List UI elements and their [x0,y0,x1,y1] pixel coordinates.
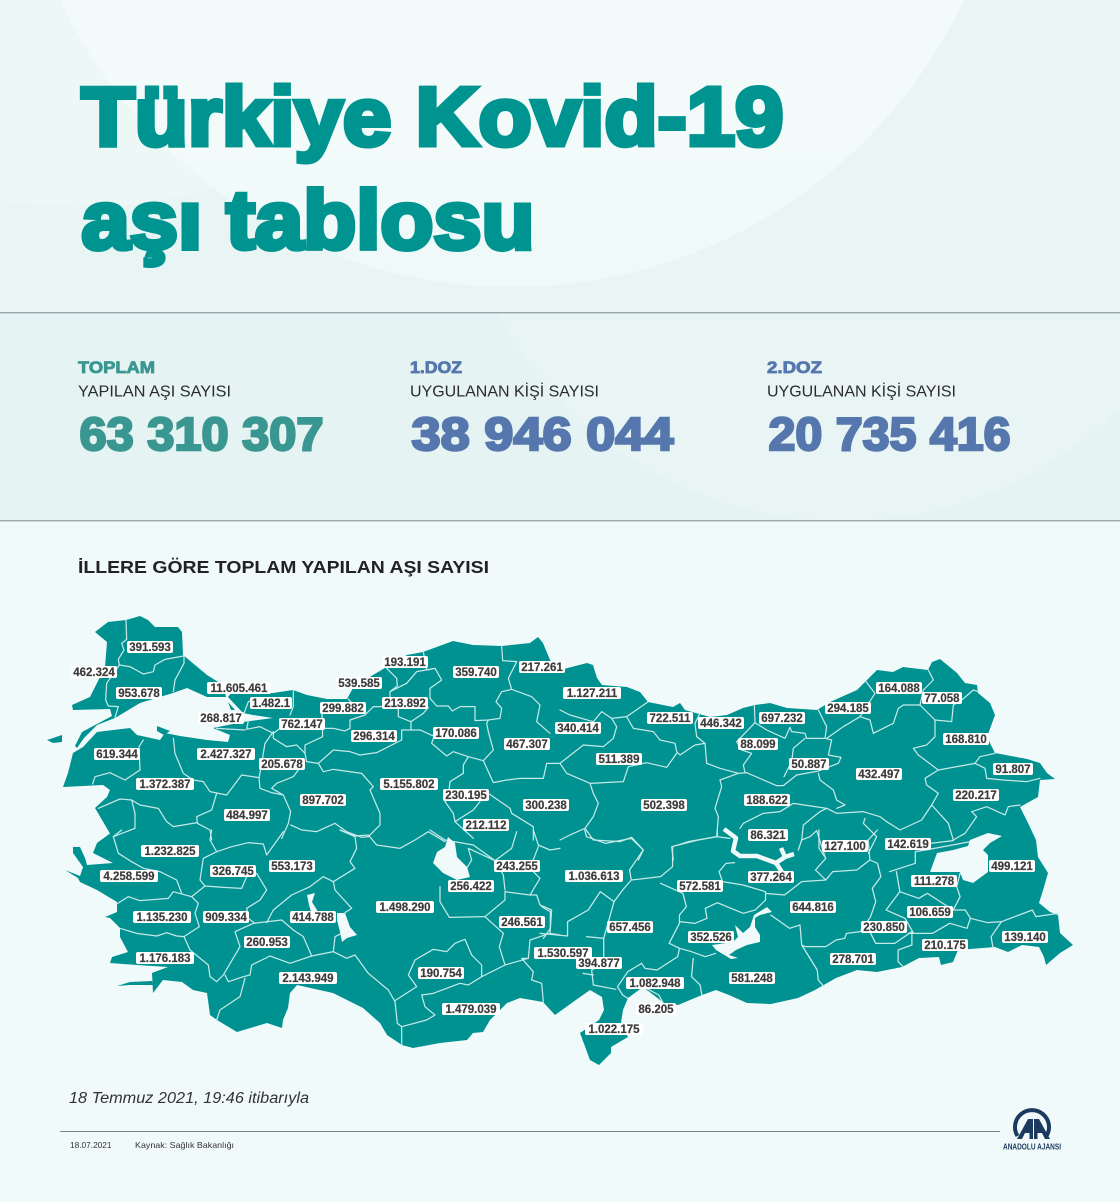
label 296.314: 296.314 [353,731,395,743]
label 299.882: 299.882 [322,703,364,715]
stat: 2. doz [767,359,1010,460]
label 212.112: 212.112 [466,820,506,832]
stat: 1. doz: 38 946 044 [412,408,674,460]
label 188.622: 188.622 [746,795,788,807]
label 164.088: 164.088 [878,683,920,695]
label 391.593: 391.593 [129,642,171,654]
label 352.526: 352.526 [690,932,732,944]
label 220.217: 220.217 [955,790,997,802]
label 127.100: 127.100 [824,841,866,853]
label 377.264: 377.264 [750,872,792,884]
stat: toplam [78,359,324,460]
footer source: Kaynak: Sağlık Bakanlığı [135,1140,234,1150]
label 499.121: 499.121 [991,861,1033,873]
label 1.127.211: 1.127.211 [567,688,618,700]
stat: toplam: TOPLAM [78,359,155,377]
label 326.745: 326.745 [212,866,254,878]
stat: 2. doz: 2.DOZ [767,359,822,377]
label 1.232.825: 1.232.825 [144,846,196,858]
label 217.261: 217.261 [521,662,563,674]
label 193.191: 193.191 [384,657,426,669]
land: Thrace [72,616,226,748]
title: Türkiye Kovid-19 [82,70,784,163]
label 462.324: 462.324 [73,667,115,679]
label 300.238: 300.238 [525,800,567,812]
label 210.175: 210.175 [924,940,966,952]
stat: 1. doz: 1.DOZ [410,359,462,377]
label 1.036.613: 1.036.613 [568,871,620,883]
label 88.099: 88.099 [740,739,776,751]
province value labels [71,641,1048,1036]
label 246.561: 246.561 [501,917,543,929]
label 432.497: 432.497 [858,769,900,781]
stat: toplam: YAPILAN AŞI SAYISI [78,384,231,400]
lake: Keban [724,829,794,872]
map heading: İLLERE GÖRE TOPLAM YAPILAN AŞI SAYISI [78,557,489,577]
label 243.255: 243.255 [496,861,538,873]
stat: 1. doz [410,359,674,460]
lake: Tuz [433,837,470,880]
label 909.334: 909.334 [205,912,247,924]
label 4.258.599: 4.258.599 [103,871,155,883]
label 1.498.290: 1.498.290 [379,902,431,914]
label 77.058: 77.058 [924,693,960,705]
label 230.195: 230.195 [445,790,487,802]
label 359.740: 359.740 [455,667,497,679]
stat: toplam: 63 310 307 [80,408,324,460]
label 1.530.597: 1.530.597 [537,948,589,960]
label 230.850: 230.850 [863,922,905,934]
label 170.086: 170.086 [435,728,477,740]
label 953.678: 953.678 [118,688,160,700]
title [82,70,784,266]
label 91.807: 91.807 [995,764,1031,776]
label 572.581: 572.581 [679,881,721,893]
label 897.702: 897.702 [302,795,344,807]
stat: 1. doz: UYGULANAN KİŞİ SAYISI [410,382,599,400]
label 111.278: 111.278 [914,876,955,888]
stat: 2. doz: 20 735 416 [768,408,1010,460]
lake: Van [930,833,1002,883]
date note: 18 Temmuz 2021, 19:46 itibarıyla [69,1090,309,1107]
label 619.344: 619.344 [96,749,138,761]
label 168.810: 168.810 [945,734,987,746]
label 340.414: 340.414 [557,723,599,735]
label 2.427.327: 2.427.327 [200,749,252,761]
label 467.307: 467.307 [506,739,548,751]
label 5.155.802: 5.155.802 [383,779,435,791]
label 394.877: 394.877 [578,958,620,970]
background [0,188,1120,522]
label 2.143.949: 2.143.949 [282,973,334,985]
label 762.147: 762.147 [281,719,323,731]
label 50.887: 50.887 [791,759,827,771]
label 539.585: 539.585 [338,678,380,690]
label 213.892: 213.892 [384,698,426,710]
lake: Atatürk [712,907,772,959]
label 484.997: 484.997 [226,810,268,822]
label 1.479.039: 1.479.039 [445,1004,497,1016]
label 106.659: 106.659 [909,907,951,919]
label 11.605.461: 11.605.461 [211,683,268,695]
label 190.754: 190.754 [420,968,462,980]
lake: Eğirdir and Beyşehir [307,893,357,942]
label 722.511: 722.511 [650,713,691,725]
logo: Anadolu Ajansı [1003,1110,1061,1152]
label 1.022.175: 1.022.175 [588,1024,640,1036]
label 414.788: 414.788 [292,912,334,924]
footer line [60,1131,1000,1132]
title: aşı tablosu [82,174,534,266]
label 86.321: 86.321 [750,830,786,842]
label 1.082.948: 1.082.948 [629,978,681,990]
footer date: 18.07.2021 [70,1140,112,1150]
label 260.953: 260.953 [246,937,288,949]
label 446.342: 446.342 [700,718,742,730]
label 553.173: 553.173 [271,861,313,873]
label 294.185: 294.185 [827,703,869,715]
label 1.372.387: 1.372.387 [139,779,191,791]
label 205.678: 205.678 [261,759,303,771]
label 86.205: 86.205 [638,1004,674,1016]
label 644.816: 644.816 [792,902,834,914]
label 1.135.230: 1.135.230 [136,912,188,924]
label 502.398: 502.398 [643,800,685,812]
label 268.817: 268.817 [200,713,242,725]
label 278.701: 278.701 [832,954,874,966]
label 142.619: 142.619 [887,839,929,851]
land: Anatolia [63,637,1073,1065]
label 581.248: 581.248 [731,973,773,985]
label 657.456: 657.456 [609,922,651,934]
map of Turkey [47,616,1073,1065]
label 139.140: 139.140 [1004,932,1046,944]
islands [47,702,235,986]
label 1.176.183: 1.176.183 [139,953,191,965]
stat: 2. doz: UYGULANAN KİŞİ SAYISI [767,382,956,400]
label 511.389: 511.389 [599,754,639,766]
label 1.482.1: 1.482.1 [252,698,291,710]
label 697.232: 697.232 [761,713,803,725]
province borders [93,620,560,840]
label 256.422: 256.422 [450,881,492,893]
logo: Anadolu Ajansı: ANADOLU AJANSI [1003,1142,1061,1152]
